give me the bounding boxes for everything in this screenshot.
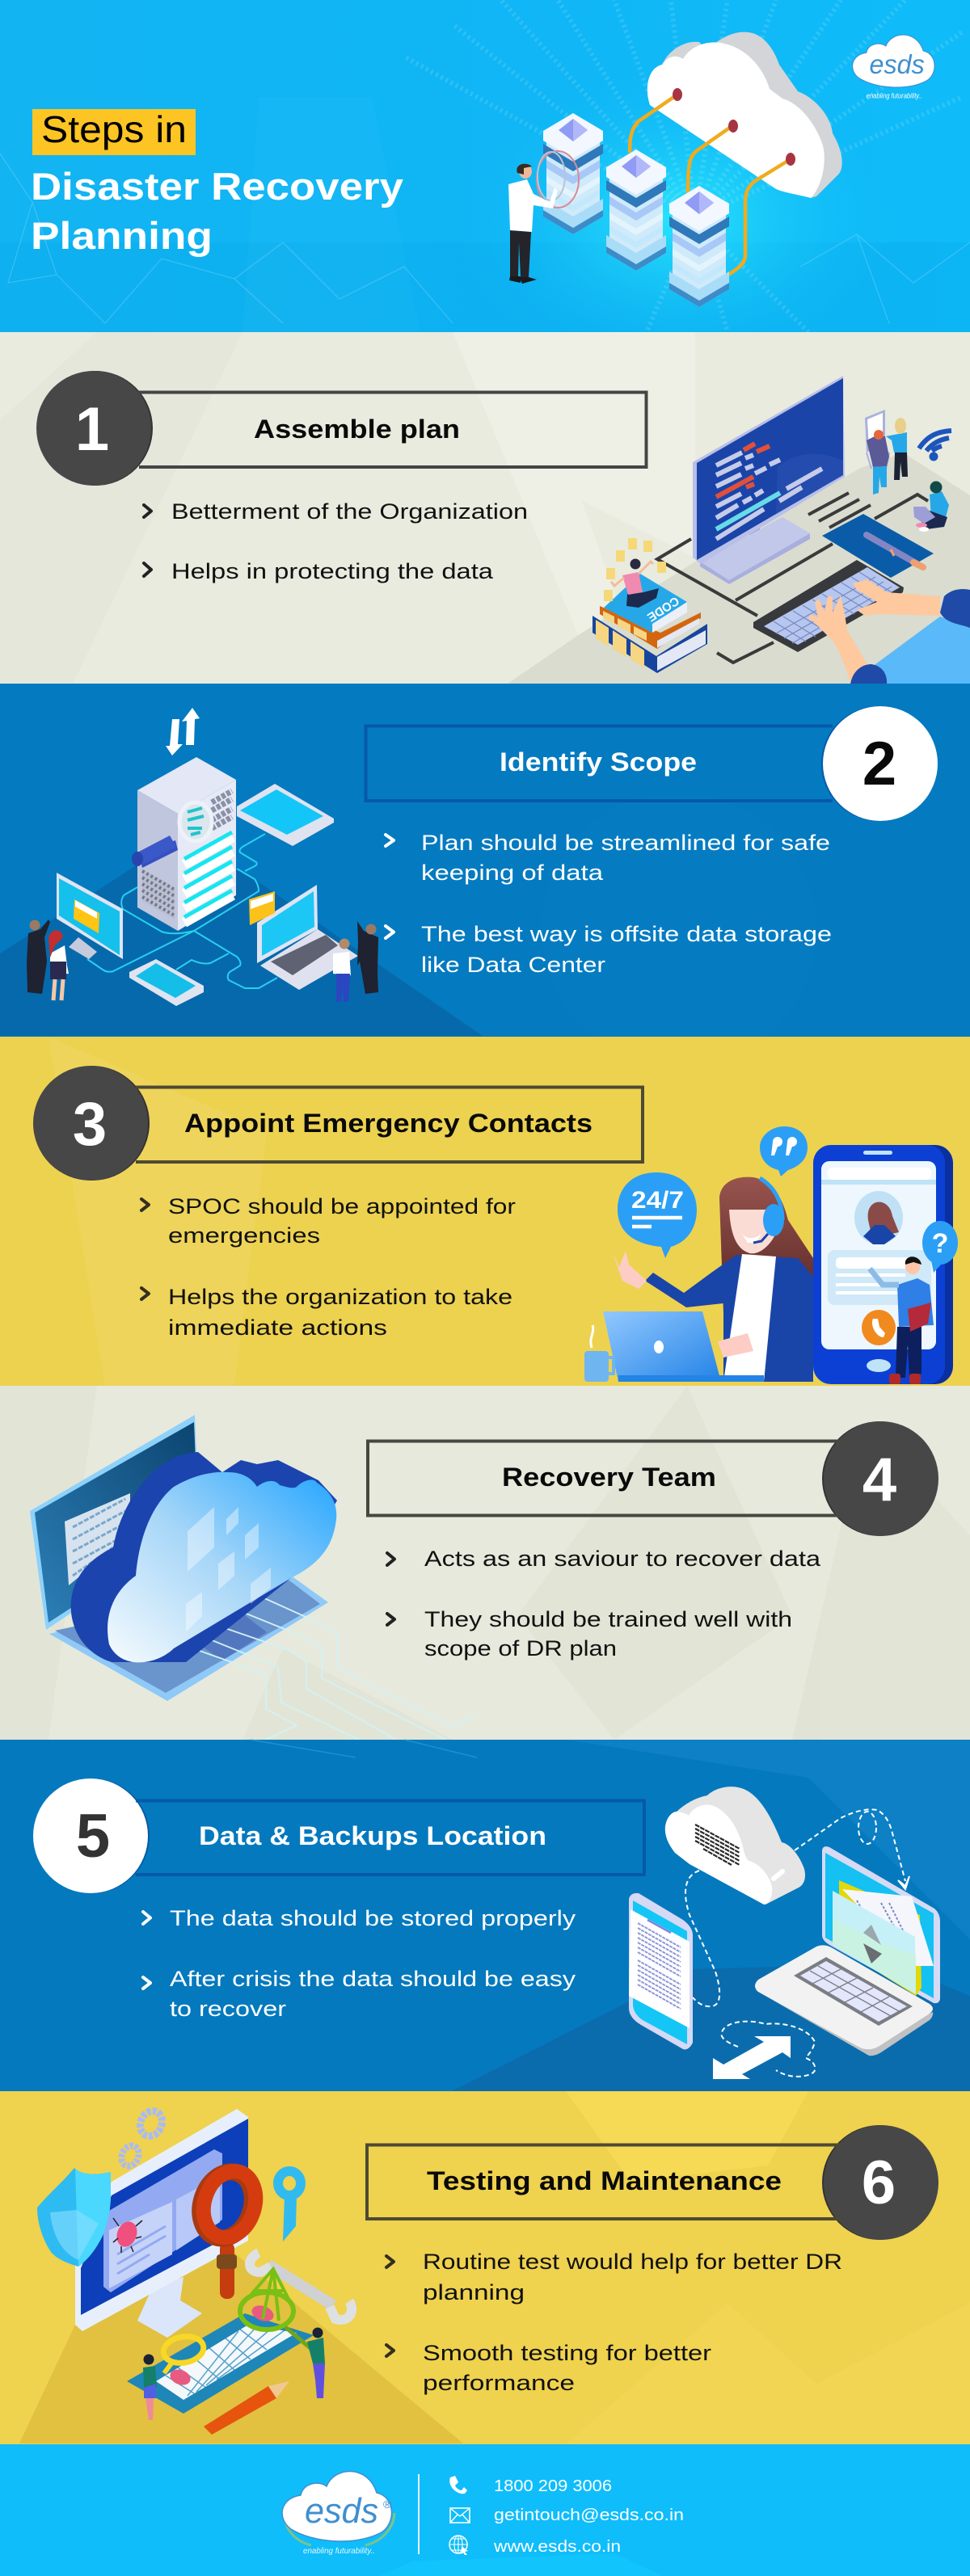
contact: website [449, 2536, 621, 2556]
title box: Identify Scope: Identify Scope [500, 747, 697, 777]
logo: esds footer [282, 2471, 394, 2556]
title box: Identify Scope [365, 726, 833, 801]
illustration: server with devices [27, 708, 378, 1006]
panel: footer contact [0, 2444, 970, 2576]
number badge 6 [822, 2125, 938, 2240]
title box: Testing and Maintenance: Testing and Maintenance [427, 2166, 782, 2195]
bullet: easy to recover [143, 1967, 576, 2021]
number badge 1 [36, 371, 153, 486]
illustration: bug testing monitor [37, 2107, 352, 2435]
contact: website: www.esds.co.in [493, 2538, 621, 2556]
bullet: SPOC [141, 1194, 516, 1248]
logo: esds top right [853, 35, 934, 100]
logo: esds top right: esds [870, 49, 925, 79]
illustration: developer workspace: CODE [644, 593, 681, 624]
bullet: SPOC: emergencies [168, 1223, 320, 1248]
title box: Data and Backups Location: Data & Backups Location [199, 1821, 546, 1850]
contact: phone [449, 2476, 612, 2495]
panel: step 3 Appoint Emergency Contacts [0, 1037, 970, 1386]
bullet: saviour: Acts as an saviour to recover data [424, 1547, 821, 1571]
panel: step 5 Data & Backups Location [0, 1740, 970, 2091]
heading: Steps in: Steps in [41, 108, 187, 150]
bullet: offsite storage: like Data Center [421, 953, 605, 977]
logo: esds footer: esds [305, 2491, 378, 2531]
illustration: engineer at server [508, 151, 579, 284]
title box: Assemble plan: Assemble plan [254, 415, 460, 444]
bullet: Betterment of the Organization: Betterment of the Organization [171, 499, 528, 524]
number badge 3: 3 [73, 1090, 107, 1159]
bullet: routine test: Routine test would help for better DR [423, 2250, 842, 2274]
number badge 4: 4 [862, 1446, 896, 1514]
logo: esds top right: enabling futurability.. [867, 92, 922, 100]
title box: Testing and Maintenance [367, 2145, 841, 2219]
bullet: stored properly: The data should be stored properly [170, 1906, 576, 1930]
illustration: phone support: ? [932, 1228, 948, 1259]
bullet: immediate actions: Helps the organization to take [168, 1285, 512, 1309]
bullet: streamlined plan: Plan should be streamlined for safe [421, 831, 830, 855]
bullet: immediate actions: immediate actions [168, 1315, 387, 1340]
bullet: smooth testing: performance [423, 2371, 575, 2395]
contact: phone: 1800 209 3006 [494, 2477, 612, 2495]
illustration: cloud, tablet and laptop backup [629, 1787, 940, 2079]
number badge 5: 5 [76, 1802, 110, 1871]
number badge 3 [33, 1066, 150, 1181]
title box: Assemble plan [139, 393, 647, 467]
bullet: routine test: planning [423, 2280, 525, 2305]
bullet: Helps in protecting the data: Helps in protecting the data [171, 559, 494, 583]
number badge 1: 1 [75, 395, 109, 464]
number badge 5 [33, 1778, 150, 1893]
bullet: easy to recover: After crisis the data should be easy [170, 1967, 576, 1991]
title box: Recovery Team: Recovery Team [502, 1463, 716, 1492]
bullet: smooth testing: Smooth testing for better [423, 2341, 711, 2365]
bullet: streamlined plan [386, 831, 830, 885]
heading: Disaster Recovery Planning: Planning [31, 214, 213, 257]
bullet: trained: They should be trained well with [424, 1607, 792, 1631]
illustration: phone support [584, 1126, 958, 1384]
bullet: offsite storage: The best way is offsite data storage [421, 922, 832, 946]
heading: Disaster Recovery Planning: Disaster Recovery [31, 165, 403, 208]
bullet: SPOC: SPOC should be appointed for [168, 1194, 516, 1219]
bullet: immediate actions [141, 1285, 512, 1340]
title box: Recovery Team [368, 1442, 841, 1516]
title box: Appoint Emergency Contacts: Appoint Emergency Contacts [184, 1109, 593, 1138]
number badge 6: 6 [862, 2149, 896, 2217]
illustration: cloud with servers [543, 32, 842, 307]
bullet: smooth testing [386, 2341, 711, 2395]
logo: esds footer: enabling futurability.. [303, 2546, 375, 2556]
illustration: developer workspace [593, 376, 970, 684]
panel: step 1 Assemble plan [0, 332, 970, 684]
illustration: cloud over laptop [30, 1415, 476, 1740]
title box: Appoint Emergency Contacts [136, 1088, 643, 1162]
bullet: streamlined plan: keeping of data [421, 861, 604, 885]
panel: step 4 Recovery Team [0, 1386, 970, 1740]
number badge 4 [822, 1421, 938, 1536]
heading: Disaster Recovery Planning [31, 165, 403, 257]
illustration: phone support: 24/7 [631, 1187, 684, 1214]
bullet: routine test [386, 2250, 842, 2305]
number badge 2: 2 [862, 730, 896, 798]
panel: hero header [0, 0, 970, 372]
logo: esds top right: ® [927, 56, 934, 65]
bullet: trained: scope of DR plan [424, 1636, 617, 1661]
logo: esds footer: ® [383, 2498, 392, 2511]
contact: email: getintouch@esds.co.in [494, 2507, 684, 2524]
bullet: offsite storage [386, 922, 832, 977]
panel: step 2 Identify Scope [0, 684, 970, 1067]
bullet: trained [387, 1607, 792, 1661]
title box: Data and Backups Location [136, 1800, 644, 1875]
number badge 2 [821, 706, 938, 821]
panel: step 6 Testing and Maintenance [0, 2091, 970, 2444]
bullet: easy to recover: to recover [170, 1997, 286, 2021]
